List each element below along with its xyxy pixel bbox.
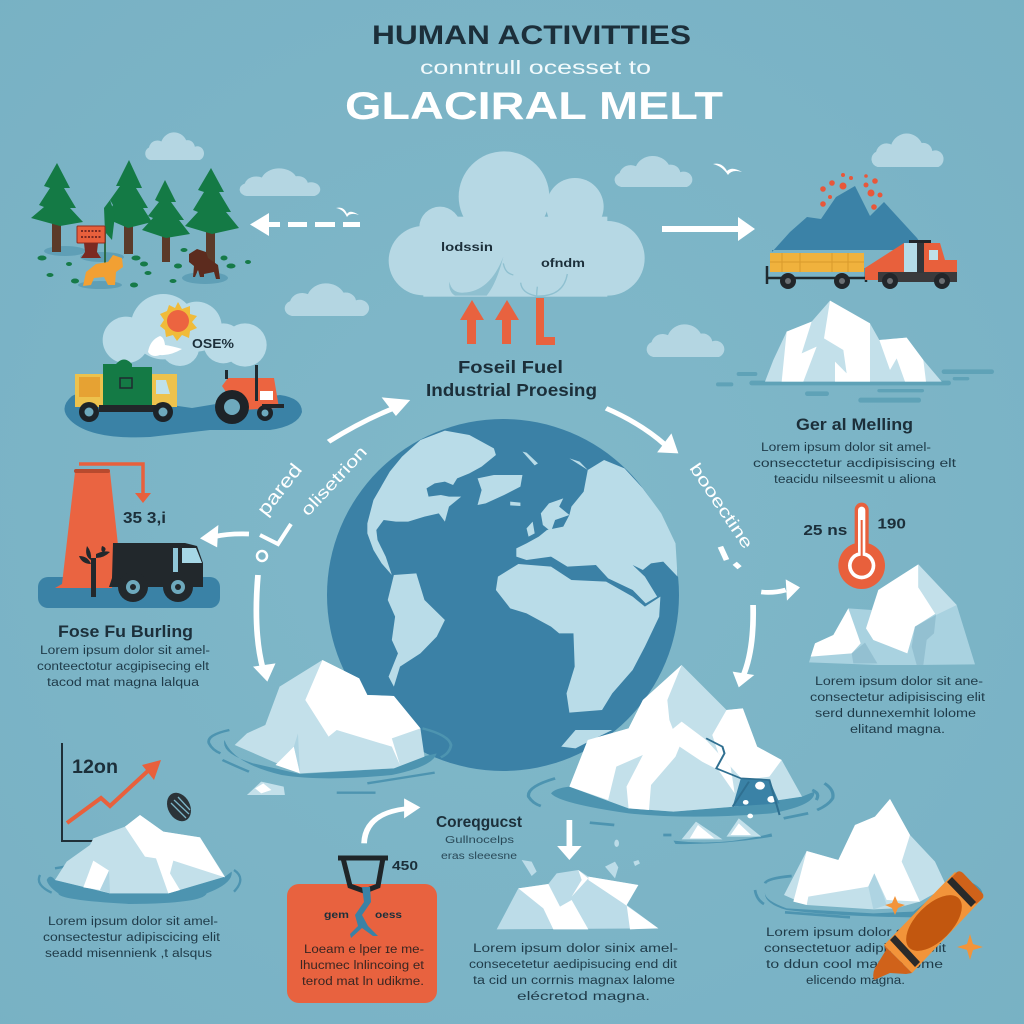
text: bottom right: consectetuor adipiscing elit	[764, 943, 947, 955]
text: right middle: consectetur adipisiscing elit	[810, 692, 986, 704]
panel: red drill box: 450	[392, 859, 418, 873]
text: right middle: elitand magna.	[850, 724, 945, 736]
text: bottom center: ta cid un corrnis magnax lalome	[473, 975, 675, 987]
text: bottom center	[469, 943, 678, 1003]
heading and text: general melting: consecctetur acdipisiscing elt	[753, 458, 957, 470]
iceberg bottom right	[755, 799, 982, 917]
iceberg bottom left	[39, 815, 240, 904]
iceberg left	[209, 660, 451, 795]
central cloud: ofndm	[541, 258, 585, 270]
panel: red drill box: lhucmec lnlincoing et	[300, 960, 425, 972]
heading and text: fossil burning: conteectotur acgipisecing elt	[37, 661, 210, 673]
arrows: rising emissions	[460, 298, 555, 345]
iceberg front right	[528, 665, 833, 844]
rotated arrow labels: pared	[253, 460, 307, 520]
text: bottom right	[764, 927, 947, 987]
chart: rising line	[62, 743, 161, 841]
rotated arrow labels: booectine	[686, 460, 757, 552]
cloud with sun and vehicles: OSE%	[192, 336, 234, 351]
text: bottom center: Lorem ipsum dolor sinix amel-	[473, 943, 678, 955]
heading and text: fossil burning: tacod mat magna lalqua	[47, 677, 200, 689]
text: bottom left: seadd misennienk ,t alsqus	[45, 948, 212, 960]
heading and text: fossil burning: Fose Fu Burling	[58, 622, 193, 641]
thermometer and values: 190	[877, 515, 906, 532]
chart: rising line: 12on	[72, 757, 118, 778]
heading and text: general melting: teacidu nilseesmit u aliona	[774, 474, 937, 486]
heading: consequence: Gullnocelps	[445, 835, 514, 846]
text: bottom left: consectestur adipiscicing elit	[43, 932, 221, 944]
iceberg right middle	[809, 564, 975, 665]
background clouds	[145, 132, 944, 357]
title: HUMAN ACTIVITTIES	[372, 20, 691, 50]
text: right middle: serd dunnexemhit lolome	[815, 708, 976, 720]
heading and text: general melting: Ger al Melling	[796, 415, 913, 434]
thermometer and values: 25 ns	[803, 522, 847, 539]
icon: crayon	[873, 871, 984, 980]
central cloud: lodssin	[441, 242, 493, 254]
heading and text: general melting	[753, 415, 957, 486]
icon: bird right	[713, 164, 742, 175]
heading: consequence	[436, 814, 522, 862]
text: right middle: Lorem ipsum dolor sit ane-	[815, 676, 983, 688]
title	[345, 20, 723, 128]
heading and text: fossil burning: Lorem ipsum dolor sit amel-	[40, 645, 210, 657]
text: bottom right: elicendo magna.	[806, 975, 905, 987]
panel: red drill box	[287, 858, 437, 1003]
cloud with sun and vehicles	[64, 294, 302, 437]
iceberg bottom center	[497, 840, 658, 929]
thermometer and values	[803, 503, 906, 589]
icon: beetle	[162, 789, 196, 825]
text: bottom left	[43, 916, 221, 960]
heading: fossil fuel: Industrial Proesing	[426, 380, 597, 400]
heading and text: fossil burning	[37, 622, 210, 689]
heading: consequence: Coreqgucst	[436, 814, 522, 831]
heading: fossil fuel	[426, 357, 597, 400]
panel: red drill box: gem	[324, 909, 349, 921]
fossil fuel burning scene	[38, 464, 220, 608]
text: bottom right: Lorem ipsum dolor sit	[766, 927, 912, 939]
mountain and truck	[767, 173, 957, 289]
fossil fuel burning scene: 35 3,i	[123, 510, 166, 527]
central cloud	[389, 151, 645, 297]
heading and text: general melting: Lorem ipsum dolor sit amel-	[761, 442, 931, 454]
text: bottom right: to ddun cool matma lome	[766, 959, 943, 971]
text: bottom center: consecetetur aedipisucing end dit	[469, 959, 678, 971]
arrow: right to truck	[662, 217, 755, 241]
panel: red drill box: oess	[375, 909, 402, 921]
text: bottom center: elécretod magna.	[517, 991, 650, 1003]
cycle arrows	[200, 397, 800, 860]
heading: fossil fuel: Foseil Fuel	[458, 357, 563, 377]
heading: consequence: eras sleeesne	[441, 851, 518, 862]
text: bottom left: Lorem ipsum dolor sit amel-	[48, 916, 218, 928]
icon: bird left	[336, 208, 359, 217]
arrow: dashed left to forest	[250, 213, 360, 236]
panel: red drill box: terod mat ln udikme.	[302, 976, 424, 988]
title: GLACIRAL MELT	[345, 85, 723, 128]
globe	[327, 419, 679, 771]
iceberg top right	[716, 301, 994, 403]
text: right middle	[810, 676, 986, 736]
rotated arrow labels	[253, 442, 757, 561]
arrowheads	[200, 397, 800, 860]
rotated arrow labels: olisetrion	[297, 442, 371, 520]
title: conntrull ocesset to	[420, 58, 651, 79]
forest scene	[31, 160, 251, 289]
panel: red drill box: Loeam e lper ɪe me-	[304, 944, 424, 956]
